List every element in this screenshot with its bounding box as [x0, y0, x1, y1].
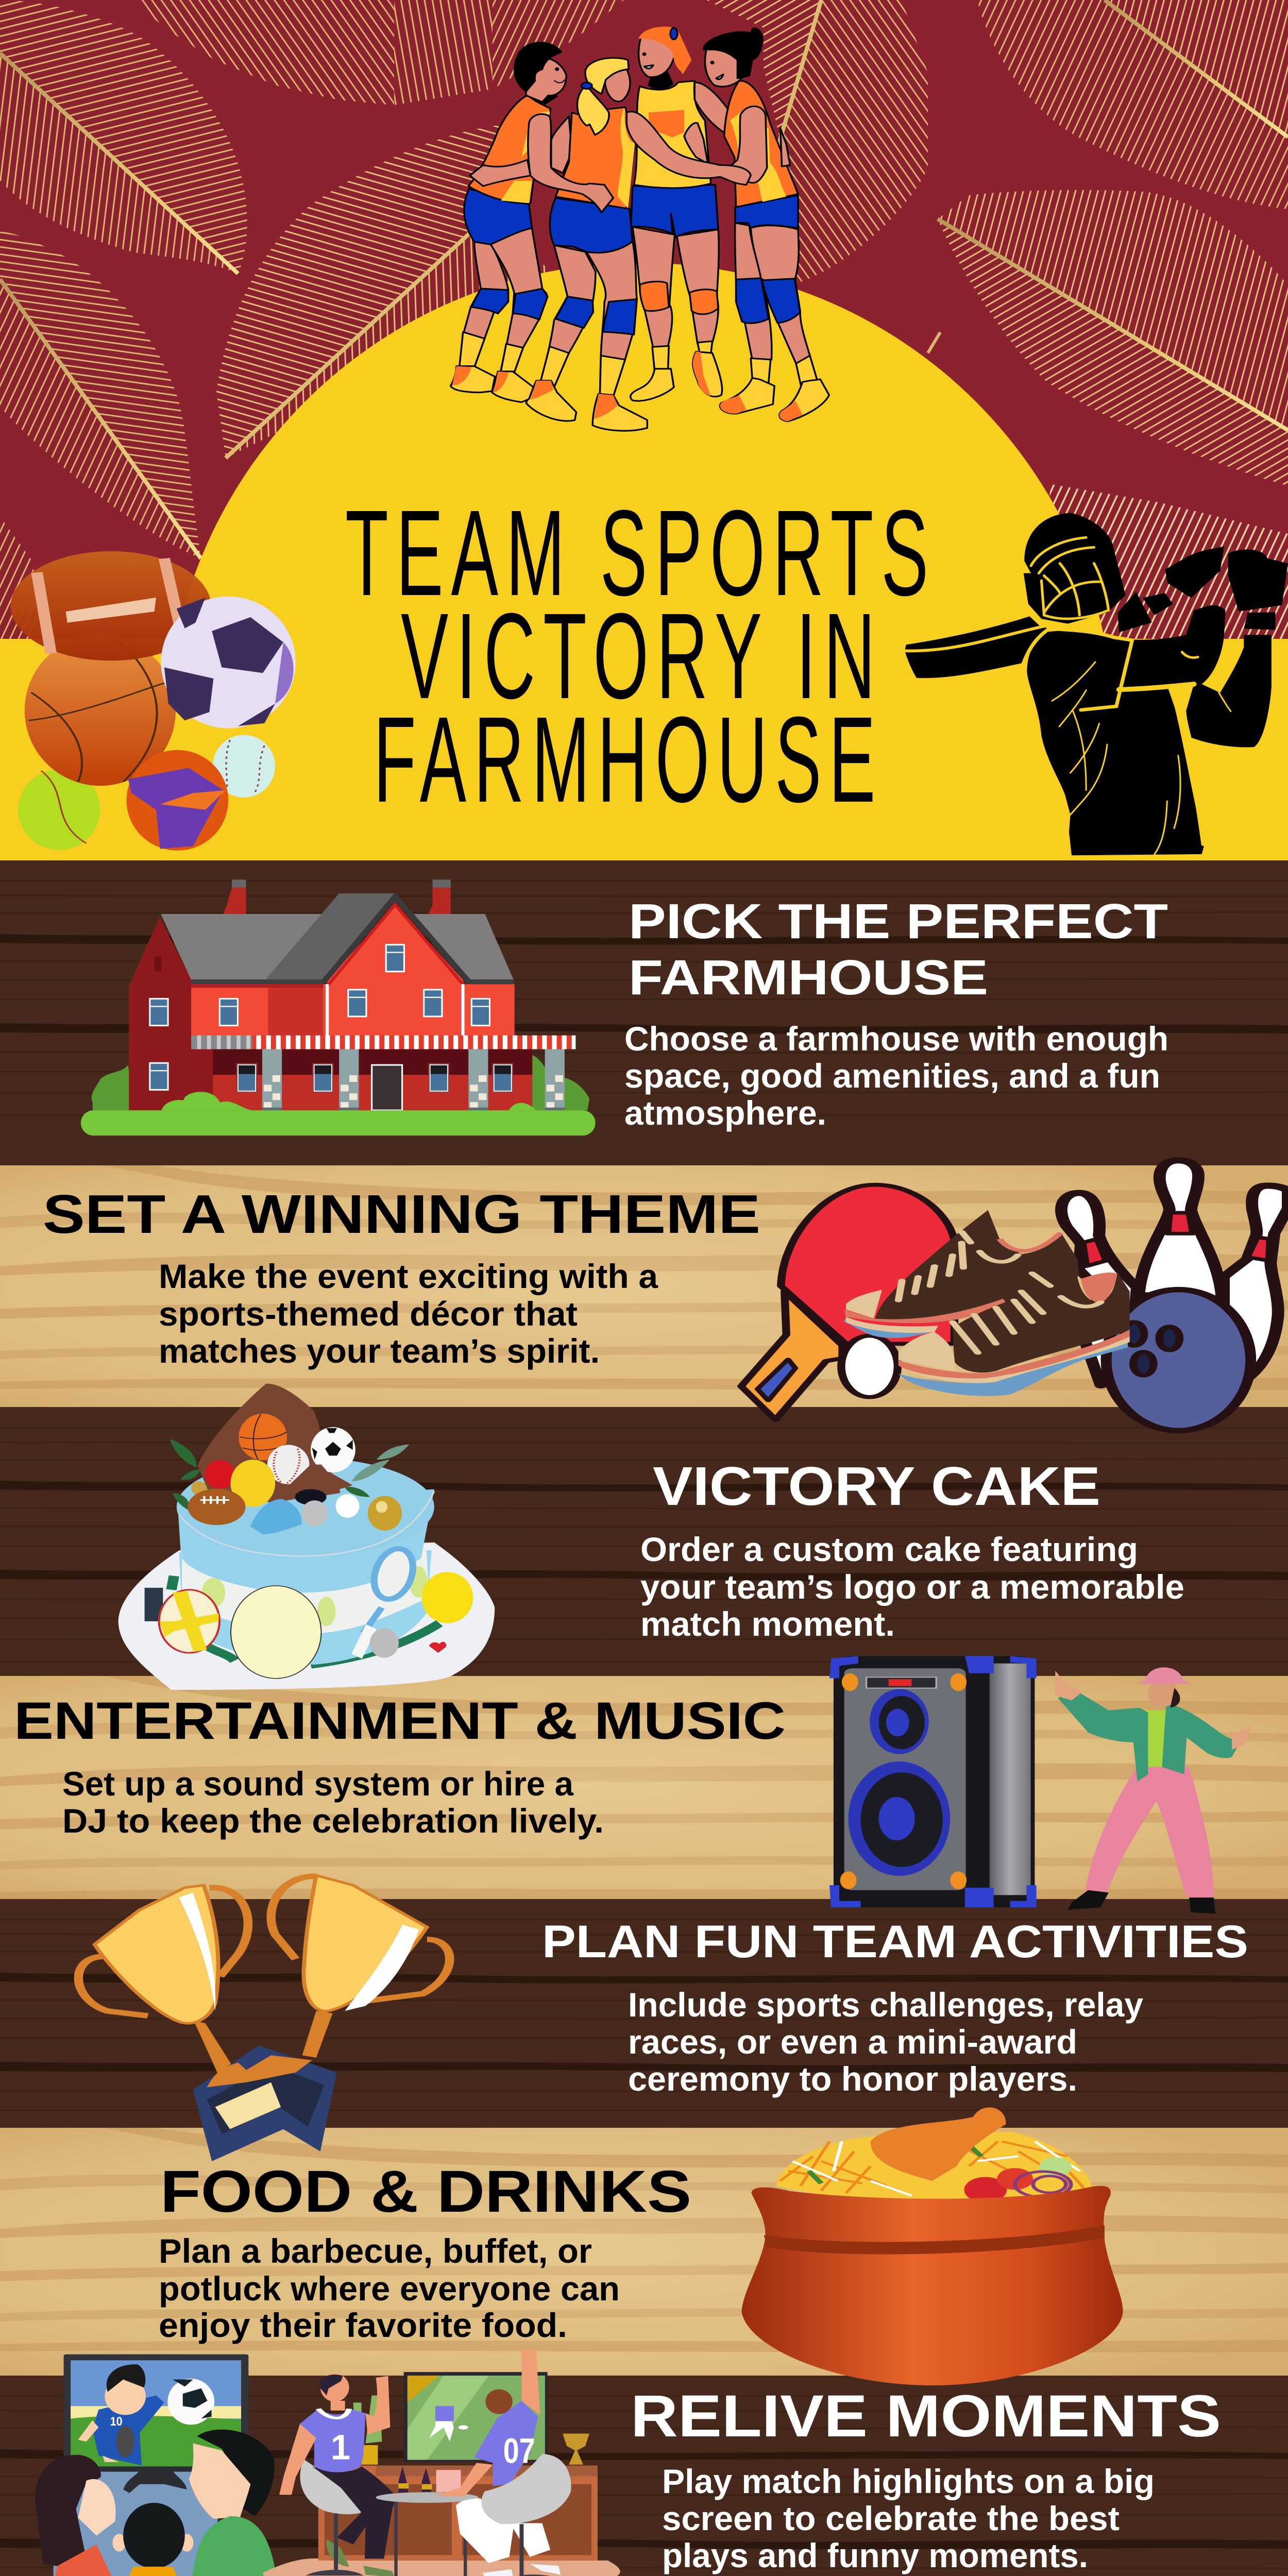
yellow sun dome [166, 263, 1115, 1212]
section: food and drinks [159, 2159, 691, 2344]
body text: matches your team’s spirit. [159, 1332, 600, 1370]
viewer: child center [112, 2503, 193, 2576]
icon: baseball [213, 735, 275, 798]
heading: ENTERTAINMENT & MUSIC [14, 1691, 786, 1750]
player: right with black bun [703, 28, 829, 421]
section: pick the perfect farmhouse [624, 894, 1168, 1132]
side decorations [145, 1588, 163, 1621]
icon: bowling ball [1106, 1290, 1251, 1431]
bat [905, 616, 1049, 678]
panel: dark plank 2 [0, 1407, 1288, 1676]
illustration: paddle, sneakers and bowling set [741, 1160, 1288, 1431]
cake body [179, 1550, 432, 1665]
TV set [64, 2354, 248, 2468]
icon: sneakers [843, 1210, 1130, 1396]
body text: Plan a barbecue, buffet, or [159, 2232, 592, 2270]
title: FARMHOUSE [374, 691, 883, 828]
TV set: 10 [110, 2415, 123, 2429]
heading: PICK THE PERFECT [629, 894, 1168, 949]
player: left with curly hair [451, 43, 613, 402]
chocolate shards [198, 1384, 353, 1503]
wall screen [404, 2372, 548, 2462]
body text [662, 2462, 1155, 2574]
viewer: woman right [189, 2430, 277, 2576]
illustration: sports victory cake [118, 1384, 495, 1690]
heading: VICTORY CAKE [653, 1456, 1100, 1517]
bar table with bottles [376, 2466, 479, 2503]
panel: light plank 1 [0, 1165, 1288, 1407]
illustration: golden trophies [78, 1875, 450, 2161]
body text: races, or even a mini-award [628, 2023, 1077, 2061]
icon: volleyball [126, 750, 228, 851]
illustration: family watching match on TV [27, 2354, 294, 2576]
section: plan fun team activities [542, 1916, 1248, 2098]
icon: soccer ball [161, 597, 296, 728]
body text [62, 1765, 604, 1840]
illustration: pile of sports balls [11, 551, 296, 851]
body text [159, 2232, 620, 2344]
body text: Make the event exciting with a [159, 1257, 658, 1295]
body text: atmosphere. [624, 1094, 826, 1132]
body text [159, 1257, 658, 1370]
illustration: red farmhouse [81, 879, 596, 1136]
body text: ceremony to honor players. [628, 2060, 1077, 2098]
viewer: woman left [35, 2455, 115, 2576]
friend number 1 [279, 2373, 396, 2576]
body text: DJ to keep the celebration lively. [62, 1802, 604, 1840]
body text: enjoy their favorite food. [159, 2306, 567, 2344]
heading: FOOD & DRINKS [160, 2159, 691, 2225]
player: blonde ponytail [526, 58, 751, 431]
cake plate [118, 1543, 495, 1690]
panel: light plank 2 [0, 1676, 1288, 1901]
gold leaf pattern background [0, 0, 1288, 639]
icon: bowling pins [1061, 1160, 1288, 1389]
icon: tennis ball [18, 770, 100, 850]
illustration: biryani clay pot [741, 2107, 1123, 2385]
panel: light plank 3 [0, 2128, 1288, 2376]
icon: american football [11, 551, 211, 660]
body text [628, 1986, 1143, 2098]
body text: your team’s logo or a memorable [640, 1568, 1184, 1606]
body text: Choose a farmhouse with enough [624, 1020, 1168, 1058]
panel: dark plank 3 [0, 1899, 1288, 2154]
heading: FARMHOUSE [629, 950, 988, 1005]
friend number 07: 07 [503, 2431, 535, 2471]
heading: PLAN FUN TEAM ACTIVITIES [542, 1916, 1248, 1967]
title [345, 485, 936, 828]
illustration: speaker [829, 1656, 1037, 1907]
toppings [239, 1414, 287, 1460]
section: victory cake [640, 1456, 1184, 1643]
illustration: huddling volleyball team [451, 27, 829, 431]
panel: dark plank 1 [0, 860, 1288, 1165]
body text: Play match highlights on a big [662, 2462, 1155, 2500]
section: entertainment and music [14, 1691, 786, 1840]
illustration: dancing person in pink hat [1055, 1667, 1252, 1914]
body text [624, 1020, 1168, 1132]
icon: basketball [25, 635, 176, 786]
body text: potluck where everyone can [159, 2269, 620, 2308]
friend number 07 [435, 2349, 571, 2576]
body text [640, 1530, 1184, 1643]
illustration: batter silhouette in helmet [905, 513, 1288, 855]
illustration: friends at a table watching the match [263, 2349, 620, 2576]
heading: RELIVE MOMENTS [631, 2383, 1221, 2449]
wood plank bands [0, 860, 1288, 2576]
player: center with orange hair [631, 27, 728, 401]
panel: dark plank 4 [0, 2376, 1288, 2576]
icon: ping pong paddle [741, 1185, 954, 1420]
title: VICTORY IN [401, 588, 883, 724]
body text: space, good amenities, and a fun [624, 1057, 1160, 1095]
section: relive moments [631, 2383, 1221, 2574]
body text: Order a custom cake featuring [640, 1530, 1138, 1568]
section: set a winning theme [43, 1184, 760, 1370]
body text: plays and funny moments. [662, 2536, 1088, 2574]
body text: screen to celebrate the best [662, 2499, 1120, 2537]
heading: SET A WINNING THEME [43, 1184, 760, 1245]
heading [629, 894, 1168, 1005]
friend number 1: 1 [331, 2428, 350, 2467]
body text: sports-themed décor that [159, 1295, 578, 1333]
body text: match moment. [640, 1605, 895, 1643]
leaves [170, 1439, 370, 1511]
body text: Set up a sound system or hire a [62, 1765, 574, 1803]
panel: hero header [0, 0, 1288, 1212]
body text: Include sports challenges, relay [628, 1986, 1143, 2024]
